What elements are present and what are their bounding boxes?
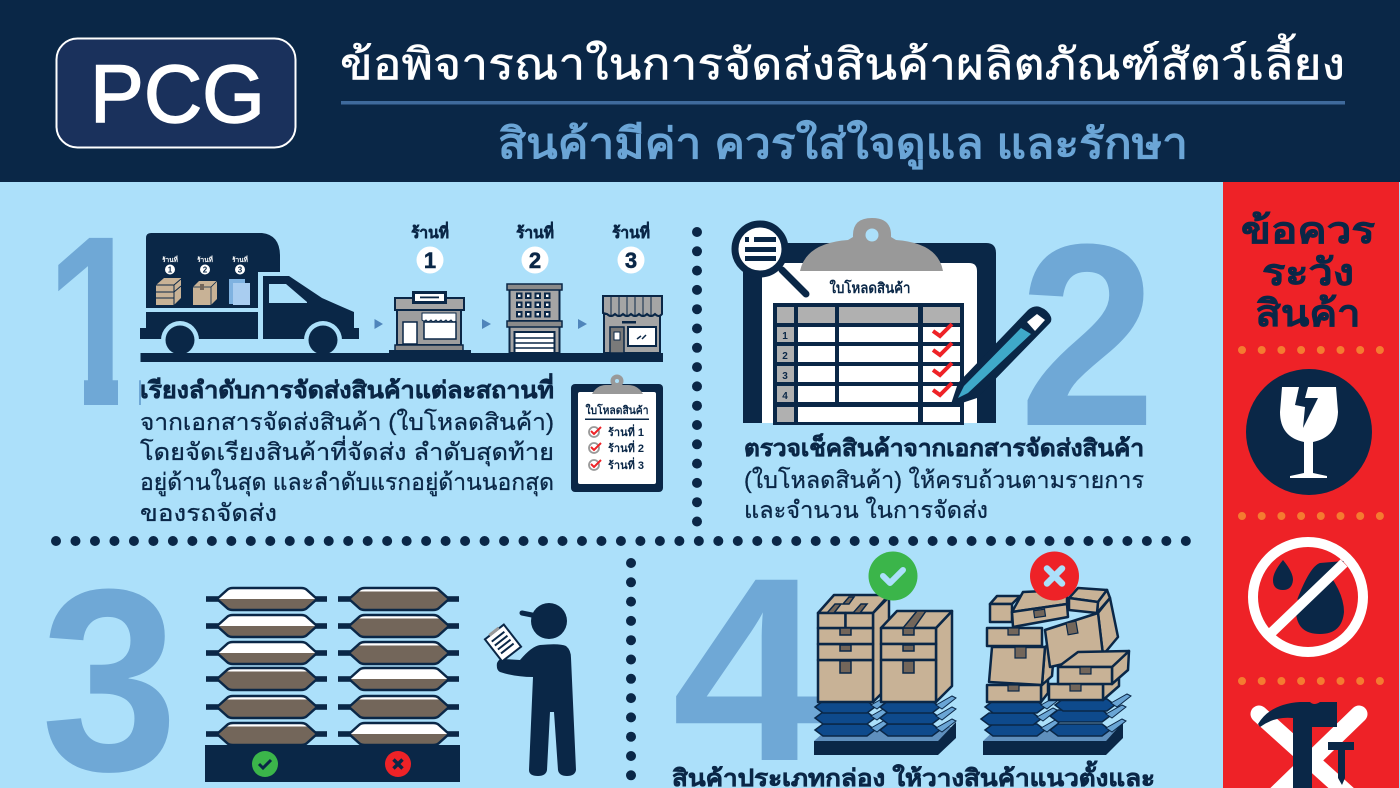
large numeral 2: 2: [1019, 191, 1156, 481]
panel heading: [1241, 210, 1375, 334]
text block: step 2: และจำนวน ในการจัดส่ง: [744, 497, 988, 523]
text block: step 2: [744, 433, 1144, 523]
arrows between stops: [374, 319, 587, 329]
icon: small clipboard checklist: ร้านที่ 3: [608, 457, 644, 472]
stop labels: ร้านที่: [612, 221, 650, 242]
cargo labels: 3: [238, 266, 243, 274]
cargo labels: 1: [168, 266, 173, 274]
large numeral 1: 1: [46, 186, 146, 457]
text block: step 2: ตรวจเช็คสินค้าจากเอกสารจัดส่งสินค้า: [744, 433, 1144, 461]
text block: step 1: ของรถจัดส่ง: [140, 500, 277, 526]
illustration: delivery truck: [140, 233, 359, 359]
icon: small clipboard checklist: ร้านที่ 1: [608, 424, 644, 439]
clip: [800, 218, 943, 271]
text block: step 1: อยู่ด้านในสุด และลำดับแรกอยู่ด้านนอกสุด: [140, 469, 554, 497]
icon: red cross: [385, 751, 411, 777]
subtitle: สินค้ามีค่า ควรใส่ใจดูแล และรักษา: [498, 119, 1188, 170]
cargo labels: 2: [203, 266, 208, 274]
magnifier: [735, 224, 806, 294]
cargo labels: ร้านที่: [197, 254, 213, 264]
icon: shop 3: [603, 296, 662, 353]
table: 2: [782, 351, 788, 362]
table: [773, 303, 964, 425]
panel: cautions: [1223, 182, 1399, 788]
illustration: bag stacks: [205, 588, 460, 782]
cargo labels: [162, 254, 248, 274]
pencil: [950, 306, 1051, 407]
stop labels: ร้านที่: [411, 221, 449, 242]
stop labels: [411, 221, 650, 274]
text block: step 1: [140, 373, 554, 526]
icon: no hammering: [1258, 702, 1360, 788]
icon: worker with clipboard: [484, 603, 576, 776]
table: 4: [782, 391, 788, 402]
icon: large clipboard with loading sheet: [735, 218, 1051, 425]
stop labels: 3: [625, 248, 637, 273]
road: [140, 353, 663, 362]
text block: step 1: โดยจัดเรียงสินค้าที่จัดส่ง ลำดับสุดท้าย: [140, 435, 554, 466]
icon: no water: [1253, 542, 1363, 652]
logo: PCG: [56, 38, 296, 148]
logo: PCG: PCG: [90, 49, 265, 140]
stop labels: ร้านที่: [516, 221, 554, 242]
header band: [0, 0, 1400, 182]
icon: green check badge: [868, 552, 918, 600]
correct stack: [206, 588, 327, 745]
stop labels: 2: [529, 248, 541, 273]
illustration: wrong box stack on pallet: [981, 588, 1131, 755]
cargo boxes: [156, 278, 250, 305]
text block: step 2: (ใบโหลดสินค้า) ให้ครบถ้วนตามรายการ: [744, 467, 1144, 493]
icon: green check: [252, 751, 278, 777]
table: 3: [782, 371, 788, 382]
pallet: [814, 722, 956, 755]
panel heading: ข้อควร: [1241, 210, 1375, 251]
icon: shop 2 building: [507, 284, 562, 353]
pallet: [983, 722, 1123, 755]
title: ข้อพิจารณาในการจัดส่งสินค้าผลิตภัณฑ์สัตว์เลี้ยง: [340, 33, 1345, 89]
icon: fragile glass: [1246, 369, 1372, 495]
panel heading: สินค้า: [1256, 293, 1360, 334]
boxes: [818, 595, 952, 702]
icon: small clipboard checklist: ใบโหลดสินค้า: [586, 403, 648, 417]
wrong stack: [338, 588, 459, 745]
illustration: correct box stack on pallet: [814, 595, 956, 755]
icon: shop 1: [389, 291, 471, 354]
text block: step 1: จากเอกสารจัดส่งสินค้า (ใบโหลดสินค้า): [140, 409, 554, 435]
icon: small clipboard checklist: ร้านที่ 2: [608, 440, 644, 455]
cargo labels: ร้านที่: [162, 254, 178, 264]
text block: step 1: เรียงลำดับการจัดส่งสินค้าแต่ละสถานที่: [140, 373, 554, 403]
panel heading: ระวัง: [1262, 252, 1354, 293]
table: 1: [782, 331, 788, 342]
icon: small clipboard checklist: [571, 374, 663, 492]
stop labels: 1: [424, 248, 436, 273]
icon: red cross badge: [1030, 552, 1079, 600]
boxes: [987, 588, 1129, 702]
cargo labels: ร้านที่: [232, 254, 248, 264]
sheet title: ใบโหลดสินค้า: [830, 279, 910, 297]
